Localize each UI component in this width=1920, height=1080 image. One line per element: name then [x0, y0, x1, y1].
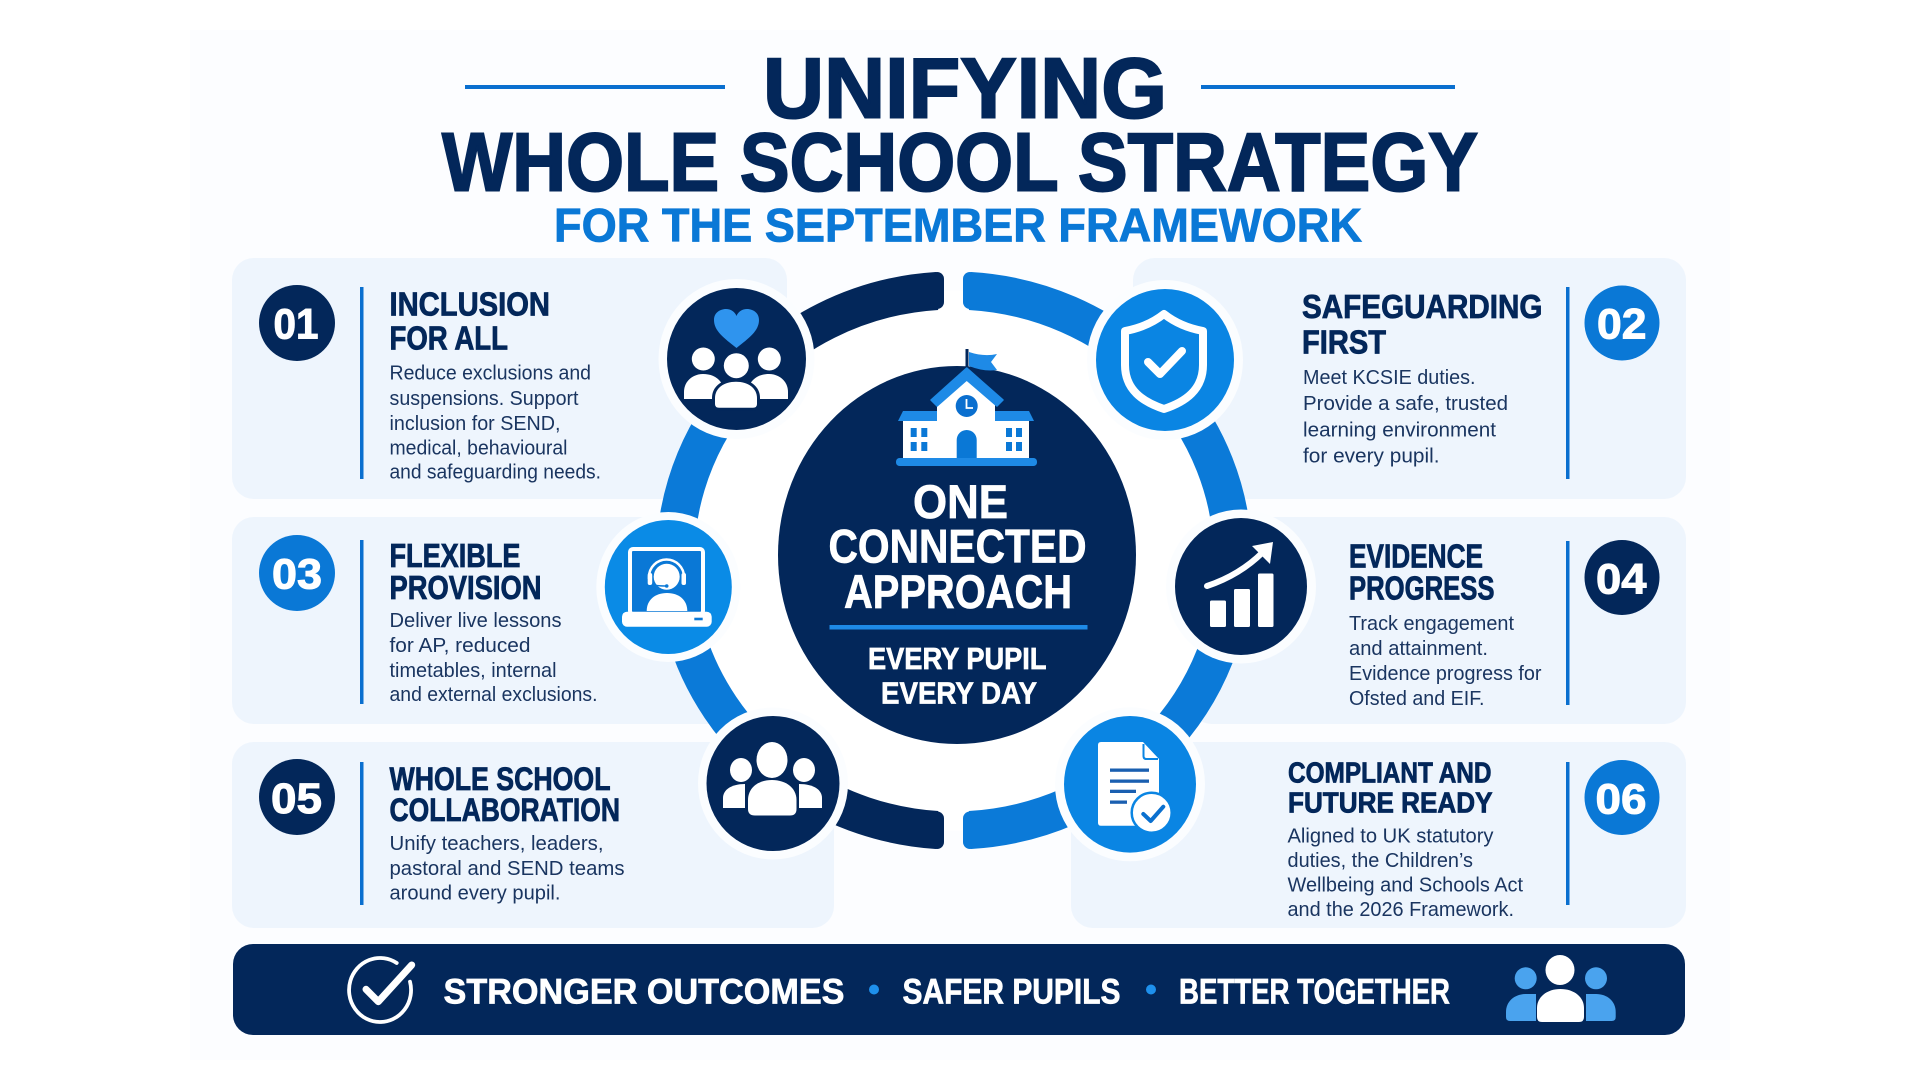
heading 03	[390, 537, 542, 606]
heading 05	[390, 761, 620, 828]
body 04: Ofsted and EIF.	[1349, 687, 1484, 710]
heading 01: INCLUSION	[390, 286, 550, 322]
heading 06: COMPLIANT AND	[1288, 758, 1492, 790]
body 01: and safeguarding needs.	[390, 460, 601, 484]
badge 04: 04	[1596, 556, 1647, 604]
icon: compliance document	[1055, 707, 1205, 861]
heading 04: PROGRESS	[1349, 570, 1494, 606]
body 04	[1349, 612, 1542, 710]
body 02	[1303, 366, 1508, 468]
heading 02: SAFEGUARDING	[1302, 288, 1542, 325]
body 01: inclusion for SEND,	[390, 412, 560, 435]
badge 06: 06	[1596, 776, 1646, 824]
panel 05: whole school collaboration	[232, 742, 834, 928]
title block	[442, 42, 1478, 252]
icon: heart and people	[658, 279, 814, 439]
title line: Unifying: UNIFYING	[763, 42, 1167, 136]
heading 05: COLLABORATION	[390, 792, 620, 828]
centre heading: ONE	[913, 475, 1008, 528]
body 02: Meet KCSIE duties.	[1303, 366, 1476, 389]
title line: Whole School Strategy: WHOLE SCHOOL STRATEGY	[442, 116, 1478, 208]
icon: school building	[896, 349, 1037, 466]
heading 02	[1302, 288, 1542, 360]
body 04: Track engagement	[1349, 612, 1514, 635]
icon: laptop with live teacher	[596, 512, 740, 662]
body 03: for AP, reduced	[390, 634, 530, 657]
body 06: and the 2026 Framework.	[1288, 898, 1514, 921]
subtitle: FOR THE SEPTEMBER FRAMEWORK	[554, 198, 1362, 252]
heading 04: EVIDENCE	[1349, 538, 1483, 574]
body 05: Unify teachers, leaders,	[390, 832, 604, 855]
panel 02: safeguarding first	[1133, 258, 1686, 499]
panel 04: evidence progress	[1190, 517, 1686, 724]
centre tagline	[868, 641, 1046, 710]
badge 06	[1584, 760, 1660, 835]
badge 05	[259, 759, 335, 835]
badge 04	[1584, 540, 1660, 615]
body 03: and external exclusions.	[390, 683, 598, 706]
badge 01	[259, 285, 335, 361]
body 01: medical, behavioural	[390, 436, 568, 460]
body 03	[390, 609, 598, 706]
icon: people group	[1506, 955, 1616, 1022]
body 05: around every pupil.	[390, 882, 560, 904]
centre heading: CONNECTED	[828, 520, 1086, 572]
heading 03: FLEXIBLE	[390, 537, 520, 574]
body 04: and attainment.	[1349, 637, 1488, 660]
body 06: duties, the Children’s	[1288, 849, 1473, 872]
centre tagline: EVERY DAY	[881, 676, 1037, 710]
body 04: Evidence progress for	[1349, 662, 1542, 685]
body 03: timetables, internal	[390, 659, 556, 682]
badge 03: 03	[272, 550, 322, 598]
centre heading: APPROACH	[844, 565, 1072, 618]
icon: check ring	[349, 958, 412, 1022]
banner message	[444, 972, 1450, 1012]
heading 06: FUTURE READY	[1288, 788, 1492, 820]
body 01	[390, 362, 601, 484]
banner message: BETTER TOGETHER	[1179, 972, 1450, 1012]
body 02: learning environment	[1303, 418, 1496, 442]
banner message: SAFER PUPILS	[902, 972, 1120, 1012]
badge 01: 01	[274, 300, 318, 348]
body 02: Provide a safe, trusted	[1303, 392, 1508, 415]
heading 01	[390, 286, 550, 356]
heading 01: FOR ALL	[390, 320, 508, 356]
body 06	[1288, 824, 1523, 921]
heading 02: FIRST	[1302, 324, 1386, 360]
body 01: Reduce exclusions and	[390, 362, 591, 384]
badge 02	[1584, 286, 1660, 360]
badge 05: 05	[271, 775, 322, 823]
panel 03: flexible provision	[232, 517, 732, 724]
bottom banner	[233, 944, 1685, 1035]
body 05	[390, 832, 624, 904]
heading 04	[1349, 538, 1494, 606]
body 02: for every pupil.	[1303, 444, 1440, 468]
icon: shield with check	[1087, 280, 1243, 440]
panel 01: inclusion for all	[232, 258, 787, 499]
badge 02: 02	[1597, 300, 1646, 348]
centre tagline: EVERY PUPIL	[868, 641, 1046, 676]
connected ring	[675, 272, 1235, 849]
body 05: pastoral and SEND teams	[390, 857, 624, 880]
centre heading	[828, 475, 1086, 618]
heading 03: PROVISION	[390, 569, 542, 606]
icon: team of people	[698, 708, 848, 860]
panel 06: compliant and future ready	[1071, 742, 1686, 928]
body 01: suspensions. Support	[390, 387, 579, 410]
icon: rising bar chart	[1166, 510, 1316, 664]
body 06: Aligned to UK statutory	[1288, 824, 1494, 848]
body 06: Wellbeing and Schools Act	[1288, 874, 1523, 896]
body 03: Deliver live lessons	[390, 609, 562, 632]
centre circle: one connected approach	[778, 349, 1136, 744]
banner message: STRONGER OUTCOMES	[444, 972, 844, 1012]
heading 05: WHOLE SCHOOL	[390, 761, 610, 797]
badge 03	[259, 535, 335, 611]
heading 06	[1288, 758, 1492, 820]
